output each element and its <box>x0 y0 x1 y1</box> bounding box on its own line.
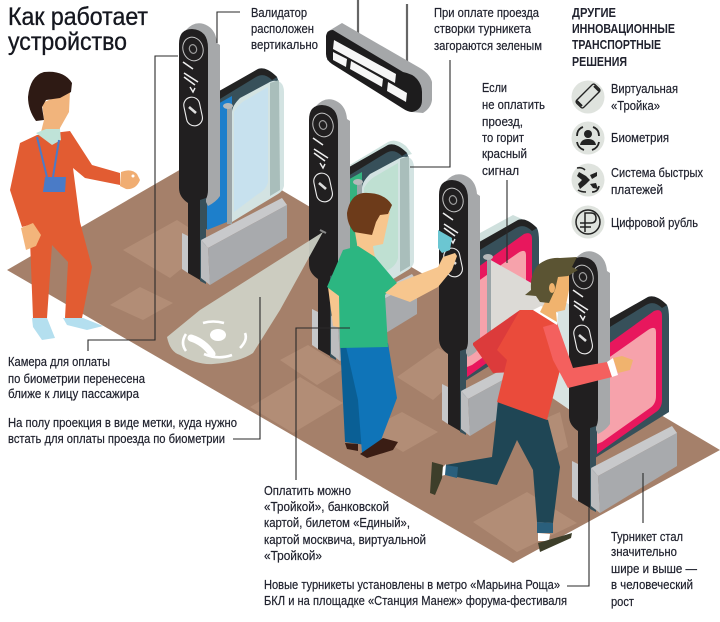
heading: other solutions: ТРАНСПОРТНЫЕ <box>572 37 661 52</box>
right arm <box>385 253 457 302</box>
cuff <box>607 358 618 377</box>
neck and face <box>40 91 70 138</box>
text: validator: расположен <box>251 21 314 36</box>
turnstile 1 (blue) <box>179 23 287 285</box>
turnstile 3 (red, closed) <box>439 174 570 436</box>
text: floor projection: встать для оплаты проезда по биометрии <box>8 431 225 446</box>
text: wider turnstile <box>611 529 697 609</box>
hair <box>28 72 72 121</box>
text: new turnstiles installed <box>264 577 567 608</box>
text: wider turnstile: Турникет стал <box>611 529 683 544</box>
neck and face <box>355 212 390 258</box>
text: new turnstiles installed: Новые турникеты установлены в метро «Марьина Роща» <box>264 577 560 592</box>
text: red signal <box>482 80 545 178</box>
lanyard and badge <box>37 137 59 177</box>
label: biometrics: Биометрия <box>611 130 669 145</box>
hair <box>525 257 578 303</box>
shoes <box>430 462 572 552</box>
turnstile 4 (red) <box>569 251 677 513</box>
text: payment methods: Оплатить можно <box>264 483 351 498</box>
title <box>8 3 148 56</box>
text: green gate: створки турникета <box>434 21 532 36</box>
heading: other solutions <box>572 5 675 69</box>
label: fast payments system: Система быстрых <box>611 165 703 180</box>
text: red signal: то горит <box>482 130 524 145</box>
label: digital ruble: Цифровой рубль <box>611 215 698 230</box>
label: virtual Troika: «Тройка» <box>611 98 660 113</box>
title: Как работает <box>8 3 148 31</box>
label: fast payments system: платежей <box>611 182 663 197</box>
heading: other solutions: РЕШЕНИЯ <box>572 54 627 69</box>
text: camera: Камера для оплаты <box>8 354 110 369</box>
payment card <box>438 230 452 253</box>
text: red signal: сигнал <box>482 163 519 178</box>
pants <box>340 342 366 445</box>
heading: other solutions: ИННОВАЦИОННЫЕ <box>572 21 675 36</box>
text: payment methods: «Тройкой» <box>264 548 322 563</box>
person: staff in orange <box>10 72 140 340</box>
collar <box>533 306 558 325</box>
turnstile 2 (green) <box>309 99 417 361</box>
text: green gate: загораются зеленым <box>434 38 542 53</box>
label: virtual Troika <box>611 81 678 113</box>
text: camera: ближе к лицу пассажира <box>8 386 140 401</box>
text: red signal: не оплатить <box>482 97 545 112</box>
pants <box>445 400 560 523</box>
text: wider turnstile: значительно <box>611 544 677 559</box>
left hand <box>21 223 41 250</box>
text: camera: по биометрии перенесена <box>8 371 146 386</box>
text: validator: вертикально <box>251 37 318 52</box>
shoes <box>32 318 55 340</box>
text: green gate <box>434 5 542 53</box>
text: payment methods: картой москвича, виртуальной <box>264 532 426 547</box>
neck and face <box>540 270 569 322</box>
closed gate door <box>489 259 570 410</box>
text: payment methods <box>264 483 426 563</box>
text: green gate: При оплате проезда <box>434 5 540 20</box>
text: payment methods: картой, билетом «Единый», <box>264 515 410 530</box>
right arm <box>543 323 612 388</box>
hand <box>613 356 633 373</box>
torso <box>497 310 560 420</box>
person: running passenger in red <box>430 257 633 552</box>
text: red signal: проезд, <box>482 114 523 129</box>
icon: virtual Troika phone <box>572 80 604 114</box>
label: virtual Troika: Виртуальная <box>611 81 678 96</box>
label: fast payments system <box>611 165 703 197</box>
right hand <box>120 170 140 189</box>
text: red signal: Если <box>482 80 507 95</box>
icon: biometrics <box>572 122 604 154</box>
shoes <box>345 443 358 451</box>
hair <box>347 193 392 235</box>
text: red signal: красный <box>482 146 527 161</box>
shirt <box>327 246 397 348</box>
text: wider turnstile: шире и выше — <box>611 561 697 576</box>
left arm <box>328 287 341 328</box>
text: new turnstiles installed: БКЛ и на площадке «Станция Манеж» форума-фестиваля <box>264 593 567 608</box>
text: validator <box>251 5 318 52</box>
text: floor projection: На полу проекция в виде метки, куда нужно <box>8 415 237 430</box>
text: wider turnstile: в человеческий <box>611 577 693 592</box>
text: camera <box>8 354 146 401</box>
callout lines <box>88 12 643 586</box>
socks <box>440 464 550 541</box>
biometric projection beam and floor mark <box>167 230 326 364</box>
ear <box>549 283 555 293</box>
text: wider turnstile: рост <box>611 594 634 609</box>
floor <box>7 150 720 563</box>
left arm <box>473 310 520 373</box>
text: validator: Валидатор <box>251 5 307 20</box>
text: floor projection <box>8 415 237 446</box>
collar <box>36 129 61 145</box>
icon: digital ruble <box>572 206 604 238</box>
title: устройство <box>8 28 127 56</box>
hanging sign <box>326 0 432 113</box>
heading: other solutions: ДРУГИЕ <box>572 5 616 20</box>
icon: fast payments system <box>572 164 604 196</box>
person: passenger in green <box>327 193 457 458</box>
text: payment methods: «Тройкой», банковской <box>264 499 389 514</box>
